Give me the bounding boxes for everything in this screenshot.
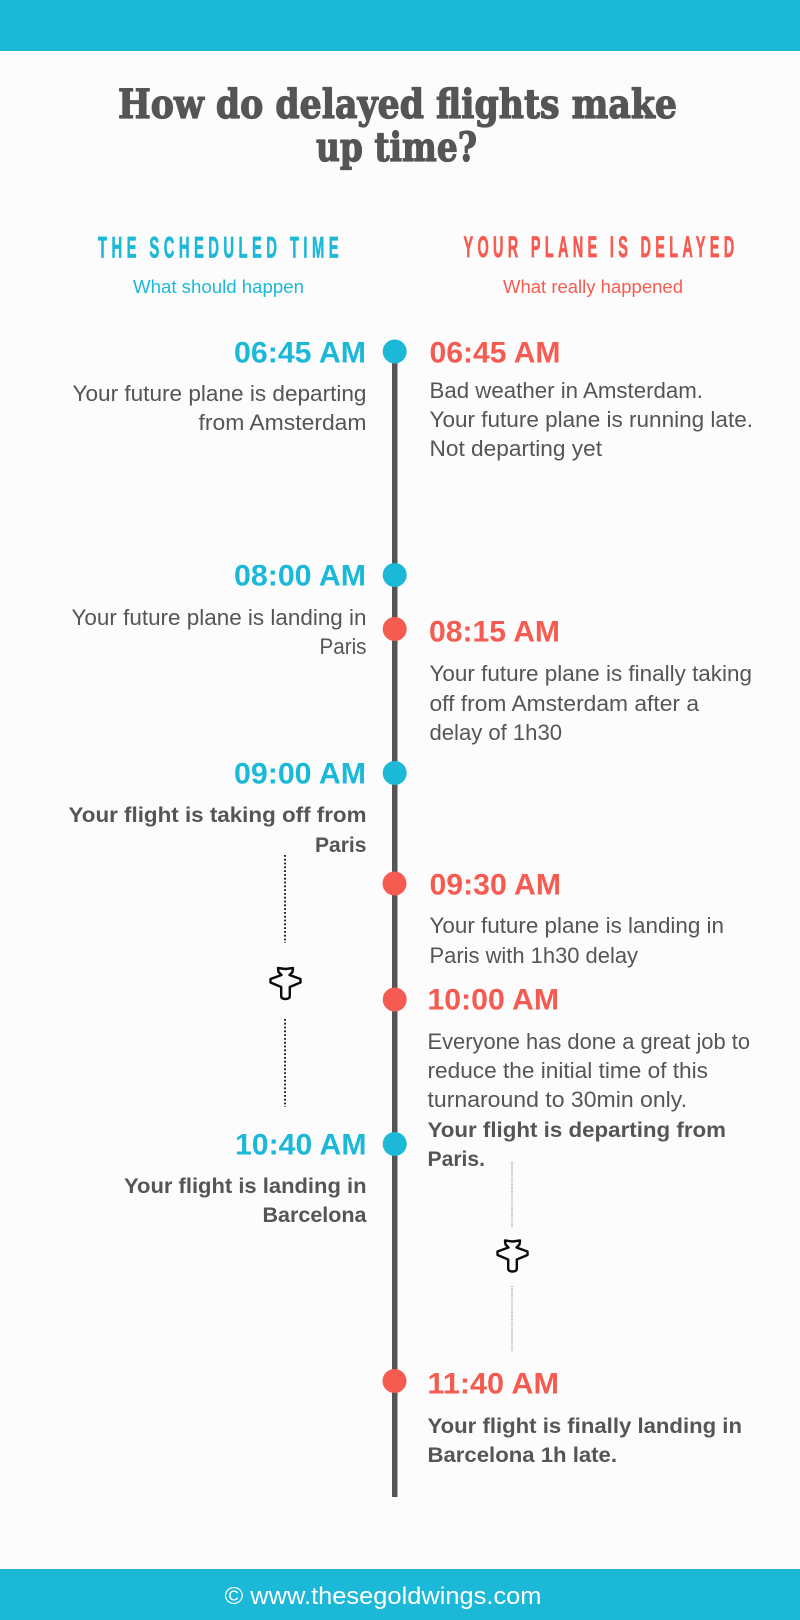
delayed 10:00 AM: reduce the initial time of this: [428, 1058, 708, 1083]
scheduled 09:00 AM: Your flight is taking off from: [68, 803, 366, 827]
scheduled 06:45 AM: Your future plane is departing: [72, 381, 366, 406]
delayed 06:45 AM: Your future plane is running late.: [430, 407, 753, 432]
delayed 09:30 AM: Your future plane is landing in: [430, 913, 724, 938]
column heading: your plane is delayed: What really happened: [503, 277, 683, 297]
delayed 10:00 AM: Your flight is departing from: [428, 1118, 726, 1142]
scheduled 08:00 AM: 08:00 AM: [234, 560, 366, 592]
column heading: the scheduled time: What should happen: [133, 277, 304, 297]
title: How do delayed flights make: [118, 81, 677, 128]
scheduled 09:00 AM: Paris: [315, 833, 367, 857]
delayed 08:15 AM: 08:15 AM: [429, 616, 560, 648]
delayed 11:40 AM: 11:40 AM: [428, 1368, 559, 1400]
delayed 10:00 AM: Paris.: [428, 1147, 485, 1171]
timeline: [382, 340, 407, 1497]
scheduled 08:00 AM: [72, 560, 367, 659]
title: [118, 81, 677, 171]
delayed 06:45 AM: [430, 336, 753, 461]
scheduled 10:40 AM: 10:40 AM: [235, 1128, 366, 1162]
scheduled 06:45 AM: [72, 336, 366, 435]
delayed 06:45 AM: Bad weather in Amsterdam.: [430, 378, 703, 403]
scheduled 10:40 AM: Barcelona: [262, 1203, 368, 1227]
column heading: your plane is delayed: [464, 231, 738, 297]
scheduled 08:00 AM: Paris: [320, 634, 366, 659]
delayed 06:45 AM: 06:45 AM: [430, 336, 560, 370]
delayed flight path with plane icon: [498, 1162, 528, 1352]
delayed 11:40 AM: [428, 1368, 742, 1467]
delayed 08:15 AM: Your future plane is finally taking: [430, 661, 752, 686]
delayed 08:15 AM: off from Amsterdam after a: [430, 691, 700, 716]
scheduled 09:00 AM: 09:00 AM: [234, 758, 366, 790]
delayed 09:30 AM: 09:30 AM: [430, 868, 561, 902]
scheduled 10:40 AM: Your flight is landing in: [124, 1174, 366, 1198]
scheduled flight path with plane icon: [270, 855, 300, 1107]
delayed 10:00 AM: turnaround to 30min only.: [428, 1087, 687, 1112]
delayed 10:00 AM: Everyone has done a great job to: [428, 1029, 750, 1054]
scheduled 08:00 AM: Your future plane is landing in: [72, 605, 367, 630]
top banner: [0, 0, 800, 51]
footer: [0, 1569, 800, 1620]
delayed 08:15 AM: [429, 616, 752, 745]
delayed 10:00 AM: [428, 984, 750, 1171]
scheduled 10:40 AM: [124, 1128, 368, 1227]
delayed 06:45 AM: Not departing yet: [430, 436, 602, 461]
scheduled 06:45 AM: 06:45 AM: [234, 336, 366, 370]
delayed 10:00 AM: 10:00 AM: [428, 984, 559, 1016]
title: up time?: [316, 124, 477, 171]
scheduled 06:45 AM: from Amsterdam: [198, 410, 366, 435]
column heading: the scheduled time: [98, 232, 343, 297]
text: THE SCHEDULED TIME: [98, 232, 343, 264]
delayed 09:30 AM: Paris with 1h30 delay: [430, 943, 638, 968]
delayed 11:40 AM: Your flight is finally landing in: [428, 1414, 742, 1438]
delayed 09:30 AM: [430, 868, 724, 968]
delayed 11:40 AM: Barcelona 1h late.: [428, 1443, 617, 1467]
delayed 08:15 AM: delay of 1h30: [430, 720, 562, 745]
scheduled 09:00 AM: [68, 758, 367, 857]
footer: © www.thesegoldwings.com: [224, 1583, 542, 1610]
